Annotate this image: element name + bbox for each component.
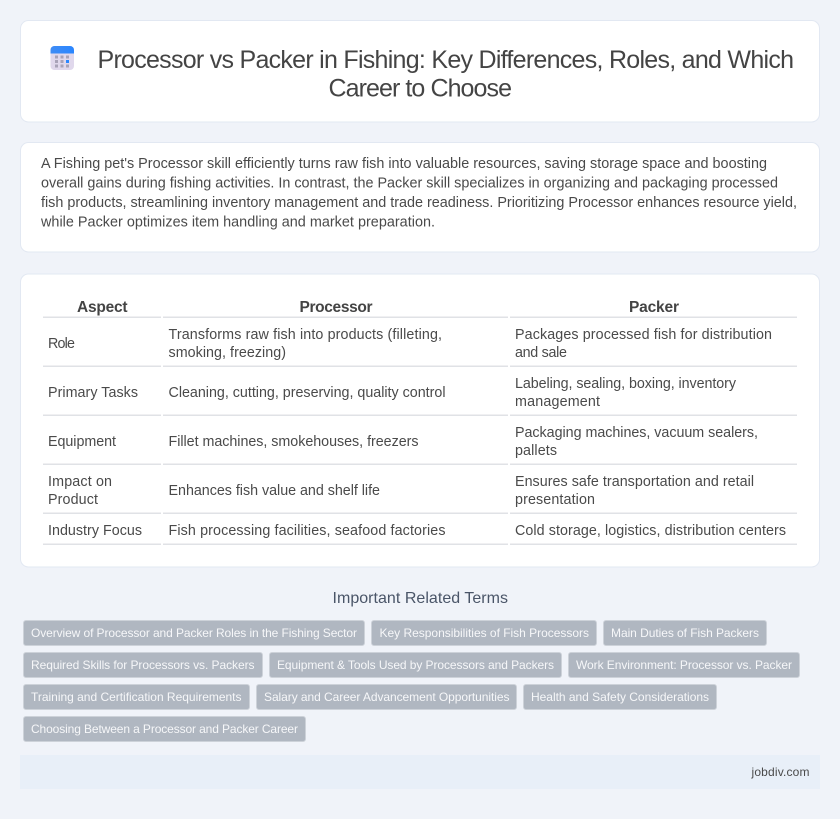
tag: Health and Safety Considerations [531,690,709,704]
description text: overall gains during fishing activities. In contrast, the Packer skill specializes in organizing and packaging processed [41,176,778,192]
panel: comparison table [20,274,820,567]
description text [40,156,797,230]
panel: description [20,142,820,252]
title: Processor vs Packer in Fishing: Key Differences, Roles, and Which [98,46,794,74]
tag: Choosing Between a Processor and Packer Career [31,722,298,736]
tag: Equipment & Tools Used by Processors and Packers [277,658,554,672]
row: role: smoking, freezing) [168,345,286,361]
row: primary tasks: Primary Tasks [48,385,138,401]
footer source: jobdiv.com [750,765,810,779]
row: role [48,327,772,361]
heading: important related terms: Important Related Terms [332,590,508,607]
row: impact on product: Enhances fish value and shelf life [168,483,380,499]
row: industry focus: Cold storage, logistics, distribution centers [515,523,786,539]
row: role: and sale [515,345,567,361]
tag: Key Responsibilities of Fish Processors [380,626,589,640]
description text: A Fishing pet's Processor skill efficiently turns raw fish into valuable resources, saving storage space and boosting [41,156,767,172]
tag [604,620,766,646]
row: role: Transforms raw fish into products (filleting, [168,327,442,343]
tag [256,684,516,710]
icon: calendar [50,46,74,70]
table header row: Aspect [77,299,128,316]
tag: Main Duties of Fish Packers [611,626,759,640]
tag [24,684,250,710]
row: industry focus: Industry Focus [48,523,142,539]
row: role: Packages processed fish for distribution [515,327,772,343]
row: equipment: Packaging machines, vacuum sealers, [515,425,758,441]
title: Career to Choose [328,74,512,102]
row: impact on product: Impact on [48,474,112,490]
tag [568,652,800,678]
tag: Required Skills for Processors vs. Packers [31,658,254,672]
table header row [77,299,679,316]
row: equipment: Fillet machines, smokehouses, freezers [168,434,418,450]
row: primary tasks [48,376,737,410]
row: impact on product: Product [48,492,98,508]
tag [24,620,364,646]
table header row: Packer [629,299,679,316]
description text: fish products, streamlining inventory management and trade readiness. Prioritizing Processor enhances resource yield, [41,195,797,211]
row: equipment: Equipment [48,434,116,450]
tag [524,684,716,710]
header panel [20,20,820,122]
row: industry focus [48,523,786,539]
row: equipment [48,425,758,459]
row: primary tasks: management [515,394,600,410]
tag [372,620,596,646]
description text: while Packer optimizes item handling and market preparation. [40,214,435,230]
row: equipment: pallets [515,443,557,459]
title [98,46,794,102]
row: impact on product: Ensures safe transportation and retail [515,474,754,490]
row: industry focus: Fish processing facilities, seafood factories [168,523,446,539]
tag: Salary and Career Advancement Opportunities [264,690,510,704]
row: primary tasks: Cleaning, cutting, preserving, quality control [168,385,446,401]
tag: Overview of Processor and Packer Roles in the Fishing Sector [31,626,357,640]
tag [270,652,562,678]
row: impact on product [48,474,754,508]
table header row: Processor [300,299,372,316]
row: role: Role [48,336,75,352]
tag [24,716,306,742]
row: primary tasks: Labeling, sealing, boxing, inventory [515,376,737,392]
tag: Training and Certification Requirements [31,690,242,704]
footer bar [20,755,820,789]
related term tags [24,620,800,742]
row: impact on product: presentation [515,492,595,508]
tag [24,652,262,678]
tag: Work Environment: Processor vs. Packer [576,658,792,672]
